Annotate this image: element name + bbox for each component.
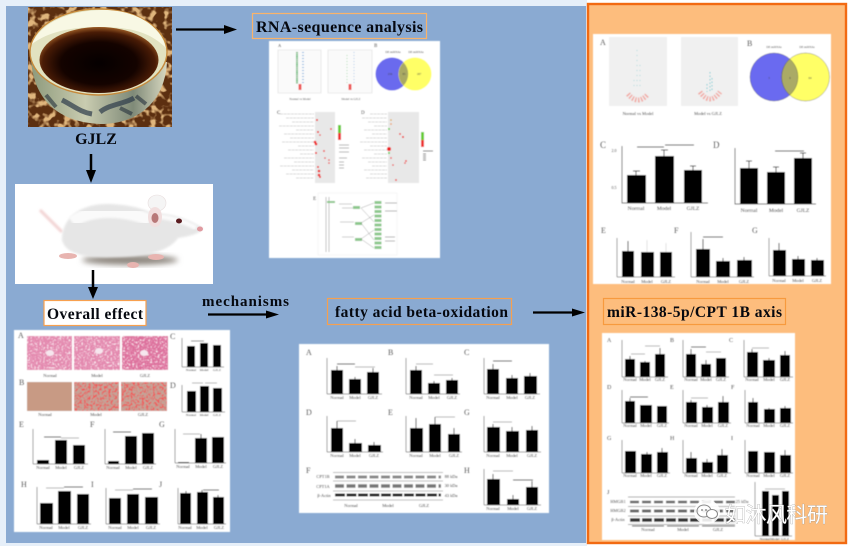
- bar chart C: [170, 332, 224, 372]
- bar chart I: Normal: [746, 473, 760, 478]
- bar chart: blot quantification: [755, 482, 792, 541]
- bar chart B: B: [388, 348, 393, 357]
- bar chart C: Model: [200, 368, 208, 372]
- bar chart A: [306, 348, 382, 400]
- volcano plots A: [600, 37, 738, 116]
- volcano plots: [278, 43, 372, 101]
- bar chart D: GJLZ: [213, 413, 221, 417]
- volcano plots A: A: [600, 38, 606, 47]
- arrow: tea to rat: [86, 154, 96, 183]
- bar chart B: B: [670, 338, 674, 344]
- bar chart F: F: [90, 420, 95, 429]
- bar chart E: E: [388, 408, 393, 417]
- panel: RNA-sequence figure: [269, 41, 440, 258]
- western blot J: Normal: [641, 527, 655, 532]
- heading: fatty acid beta-oxidation: fatty acid beta-oxidation: [335, 304, 508, 321]
- bar chart D: D: [170, 381, 176, 390]
- oil red staining B: GJLZ: [138, 412, 148, 417]
- panel: fatty acid beta-oxidation figure: [299, 344, 549, 513]
- histology A: A: [18, 331, 24, 340]
- bar chart A: Model: [349, 395, 362, 400]
- bar chart D: Model: [640, 423, 653, 428]
- bar chart F: Normal: [746, 423, 760, 428]
- bar chart C: 2.0: [612, 148, 616, 153]
- heading: Overall effect: Overall effect: [47, 306, 144, 323]
- arrow: overall effect to fatty acid: [208, 310, 279, 318]
- bar chart C: GJLZ: [780, 377, 790, 382]
- bar chart C: Normal: [628, 206, 645, 212]
- bar chart D: Model: [200, 413, 208, 417]
- venn diagram B: [747, 39, 830, 101]
- western blot J: β-Actin: [611, 517, 626, 522]
- bar chart E: E: [19, 420, 24, 429]
- heading: Overall effect: [44, 300, 146, 326]
- bar chart F: F: [674, 226, 679, 235]
- bar chart A: Model: [639, 377, 652, 382]
- oil red staining B: Model: [90, 412, 103, 417]
- bar chart H: Model: [58, 525, 71, 530]
- western blot F: [306, 466, 457, 508]
- bar chart G: Normal: [486, 453, 500, 458]
- bar chart J: Normal: [178, 525, 192, 530]
- heading: RNA-sequence analysis: RNA-sequence analysis: [256, 19, 423, 36]
- venn diagram B: 64: [808, 76, 812, 80]
- watermark: [694, 500, 828, 527]
- bar chart E: GJLZ: [718, 423, 728, 428]
- bar chart I: [91, 480, 160, 530]
- venn diagram: DE miRNAs: [408, 50, 425, 54]
- bar chart H: Normal: [39, 525, 53, 530]
- western blot F: GJLZ: [419, 503, 429, 508]
- bar chart J: J: [159, 480, 162, 489]
- bar chart G: Model: [640, 473, 653, 478]
- bar chart G: G: [464, 408, 470, 417]
- bar chart A: GJLZ: [655, 377, 665, 382]
- bar chart B: Model: [428, 395, 441, 400]
- bar chart H: [21, 480, 91, 530]
- bar chart E: Model: [55, 465, 68, 470]
- venn diagram: DE miRNAs: [385, 50, 402, 54]
- bar chart D: D: [713, 140, 720, 150]
- bar chart B: Normal: [684, 377, 698, 382]
- bar chart C: 0.5: [612, 185, 616, 190]
- bar chart D: [306, 408, 383, 458]
- western blot J: HMGB2: [610, 508, 626, 513]
- bar chart G: G: [607, 436, 612, 442]
- bar chart G: GJLZ: [527, 453, 537, 458]
- western blot J: HMGB1: [610, 499, 626, 504]
- bar chart G: G: [159, 420, 165, 429]
- image: tea cup: [28, 7, 172, 127]
- bar chart G: G: [752, 226, 758, 235]
- western blot F: 43 kDa: [445, 493, 457, 498]
- western blot F: β-Actin: [317, 493, 332, 498]
- bar chart D: [713, 140, 816, 214]
- dot plot D: [360, 111, 433, 183]
- bar chart D: GJLZ: [369, 453, 379, 458]
- bar chart B: GJLZ: [447, 395, 457, 400]
- bar chart G: Normal: [176, 464, 190, 469]
- image: white rat: [15, 184, 213, 284]
- bar chart B: Normal: [409, 395, 423, 400]
- bar chart C: C: [729, 338, 733, 344]
- western blot F: CPT1B: [316, 474, 330, 479]
- bar chart G: Normal: [772, 278, 786, 283]
- bar chart D: D: [607, 385, 612, 391]
- pathway diagram E: E: [313, 197, 316, 202]
- western blot J: [607, 490, 748, 532]
- bar chart A: A: [306, 348, 312, 357]
- panel: overall effect figure: [14, 330, 230, 532]
- bar chart F: [731, 385, 793, 428]
- bar chart C: Model: [506, 395, 519, 400]
- bar chart E: E: [601, 226, 606, 235]
- panel: blue background: [6, 6, 586, 543]
- bar chart C: C: [170, 332, 175, 341]
- bar chart I: [731, 436, 793, 478]
- western blot F: 88 kDa: [445, 474, 457, 479]
- bar chart D: Normal: [186, 413, 196, 417]
- bar chart G: Model: [195, 464, 208, 469]
- histology A: GJLZ: [140, 373, 150, 378]
- heading: miR-138-5p/CPT1B axis: miR-138-5p/CPT 1B axis: [607, 304, 782, 321]
- venn diagram B: 6: [789, 76, 791, 80]
- bar chart: blot quantification: Normal: [760, 537, 770, 541]
- dot plot C: C: [277, 111, 281, 116]
- bar chart G: Normal: [623, 473, 637, 478]
- bar chart H: H: [670, 436, 675, 442]
- bar chart B: [670, 338, 729, 382]
- bar chart H: Model: [701, 473, 714, 478]
- bar chart C: GJLZ: [687, 206, 700, 212]
- bar chart D: GJLZ: [797, 208, 810, 214]
- bar chart F: GJLZ: [739, 279, 749, 284]
- volcano plots A: Model vs GJLZ: [694, 111, 722, 116]
- venn diagram B: B: [747, 39, 752, 48]
- bar chart C: GJLZ: [213, 368, 221, 372]
- bar chart E: [388, 408, 462, 458]
- bar chart C: Model: [763, 377, 776, 382]
- bar chart F: [90, 420, 156, 470]
- bar chart H: GJLZ: [527, 506, 537, 511]
- bar chart D: [607, 385, 669, 428]
- bar chart E: E: [670, 385, 674, 391]
- venn diagram: 85: [402, 72, 406, 76]
- bar chart C: [729, 338, 793, 382]
- label: GJLZ: GJLZ: [75, 131, 117, 148]
- bar chart E: GJLZ: [449, 453, 459, 458]
- bar chart C: [600, 140, 708, 212]
- bar chart F: Normal: [696, 279, 710, 284]
- bar chart G: [607, 436, 670, 478]
- bar chart E: GJLZ: [74, 465, 84, 470]
- oil red staining B: Normal: [38, 412, 52, 417]
- bar chart I: Model: [763, 473, 776, 478]
- bar chart E: Normal: [684, 423, 698, 428]
- bar chart C: Normal: [186, 368, 196, 372]
- bar chart G: [752, 226, 826, 283]
- dot plot D: D: [361, 111, 365, 116]
- bar chart I: I: [731, 436, 733, 442]
- bar chart E: [670, 385, 731, 428]
- bar chart E: GJLZ: [661, 279, 671, 284]
- venn diagram B: DE miRNAs: [766, 45, 783, 49]
- bar chart D: GJLZ: [657, 423, 667, 428]
- bar chart H: Normal: [684, 473, 698, 478]
- bar chart G: GJLZ: [213, 464, 223, 469]
- bar chart E: Model: [641, 279, 654, 284]
- bar chart: blot quantification: Model: [770, 537, 780, 541]
- bar chart D: Normal: [741, 208, 758, 214]
- bar chart E: [19, 420, 88, 470]
- bar chart C: Normal: [486, 395, 500, 400]
- bar chart F: Model: [125, 465, 138, 470]
- bar chart: blot quantification: GJLZ: [781, 537, 789, 541]
- western blot J: Model: [677, 527, 690, 532]
- western blot F: Normal: [344, 503, 358, 508]
- volcano plots: A: [278, 43, 282, 48]
- bar chart G: GJLZ: [812, 278, 822, 283]
- bar chart A: [607, 338, 668, 382]
- bar chart B: [388, 348, 460, 400]
- bar chart G: [464, 408, 541, 458]
- venn diagram B: DE miRNAs: [799, 45, 816, 49]
- western blot J: J: [607, 490, 610, 496]
- western blot F: CPT1A: [316, 484, 331, 489]
- bar chart F: F: [731, 385, 735, 391]
- bar chart A: Normal: [623, 377, 637, 382]
- bar chart C: GJLZ: [525, 395, 535, 400]
- panel: miR-138-5p/CPT1B figure: [602, 333, 795, 541]
- bar chart E: Model: [701, 423, 714, 428]
- venn diagram B: 3: [768, 76, 770, 80]
- bar chart H: GJLZ: [717, 473, 727, 478]
- bar chart C: Normal: [745, 377, 759, 382]
- bar chart E: Normal: [409, 453, 423, 458]
- panel: orange background: [588, 4, 846, 543]
- western blot F: Model: [382, 503, 395, 508]
- bar chart G: Model: [792, 278, 805, 283]
- bar chart I: Normal: [108, 525, 122, 530]
- histology A: [18, 331, 168, 378]
- bar chart F: Normal: [106, 465, 120, 470]
- bar chart I: Model: [127, 525, 140, 530]
- bar chart G: GJLZ: [657, 473, 667, 478]
- bar chart I: GJLZ: [780, 473, 790, 478]
- label: mechanisms: mechanisms: [202, 294, 289, 310]
- bar chart F: Model: [717, 279, 730, 284]
- bar chart C: [464, 348, 540, 400]
- bar chart J: GJLZ: [214, 525, 224, 530]
- bar chart D: Model: [769, 208, 784, 214]
- watermark: 如沐风科研: [725, 504, 828, 527]
- bar chart D: [170, 381, 225, 417]
- western blot J: 25 kDa: [736, 499, 748, 504]
- bar chart H: H: [464, 466, 470, 475]
- bar chart A: Normal: [330, 395, 344, 400]
- histology A: Model: [91, 373, 104, 378]
- bar chart D: Normal: [330, 453, 344, 458]
- arrow: fatty acid to miR axis: [533, 308, 585, 316]
- volcano plots: Normal vs Model: [289, 97, 311, 101]
- bar chart C: Model: [657, 206, 672, 212]
- bar chart G: [159, 420, 226, 469]
- bar chart A: A: [607, 338, 612, 344]
- western blot F: F: [306, 466, 311, 475]
- bar chart F: GJLZ: [780, 423, 790, 428]
- bar chart C: C: [464, 348, 469, 357]
- histology A: Normal: [43, 373, 57, 378]
- bar chart H: GJLZ: [78, 525, 88, 530]
- bar chart H: H: [21, 480, 27, 489]
- oil red staining B: [19, 378, 167, 417]
- venn diagram: B: [374, 44, 378, 49]
- venn diagram: 256: [388, 72, 393, 76]
- bar chart I: GJLZ: [146, 525, 156, 530]
- bar chart D: D: [306, 408, 312, 417]
- bar chart B: Model: [700, 377, 713, 382]
- venn diagram: [374, 44, 432, 90]
- oil red staining B: B: [19, 378, 24, 387]
- arrow: tea to RNA analysis: [176, 25, 237, 34]
- panel: miRNA sequencing and validation figure: [593, 34, 831, 284]
- volcano plots: Model vs GJLZ: [342, 97, 361, 101]
- bar chart B: GJLZ: [716, 377, 726, 382]
- western blot J: GJLZ: [713, 527, 723, 532]
- bar chart G: Model: [506, 453, 519, 458]
- bar chart D: Model: [349, 453, 362, 458]
- bar chart I: I: [91, 480, 94, 489]
- bar chart C: C: [600, 140, 606, 150]
- heading: RNA-sequence analysis: [252, 14, 426, 38]
- bar chart H: Model: [507, 506, 520, 511]
- arrow: rat to overall effect: [88, 270, 98, 299]
- dot plot C: [277, 111, 349, 183]
- pathway diagram E: [313, 193, 397, 255]
- bar chart D: Normal: [623, 423, 637, 428]
- bar chart A: GJLZ: [368, 395, 378, 400]
- bar chart F: Model: [763, 423, 776, 428]
- bar chart F: GJLZ: [143, 465, 153, 470]
- bar chart H: [670, 436, 731, 478]
- bar chart E: Normal: [621, 279, 635, 284]
- western blot F: 30 kDa: [445, 483, 457, 488]
- bar chart E: Normal: [36, 465, 50, 470]
- heading: miR-138-5p/CPT1B axis: [604, 298, 786, 324]
- bar chart H: [464, 466, 541, 511]
- bar chart F: [674, 226, 754, 284]
- bar chart E: Model: [429, 453, 442, 458]
- bar chart E: [601, 226, 675, 284]
- bar chart J: [159, 480, 226, 530]
- bar chart H: Normal: [486, 506, 500, 511]
- venn diagram: 187: [417, 72, 422, 76]
- heading: fatty acid beta-oxidation: [328, 298, 512, 324]
- bar chart J: Model: [196, 525, 209, 530]
- volcano plots A: Normal vs Model: [623, 111, 654, 116]
